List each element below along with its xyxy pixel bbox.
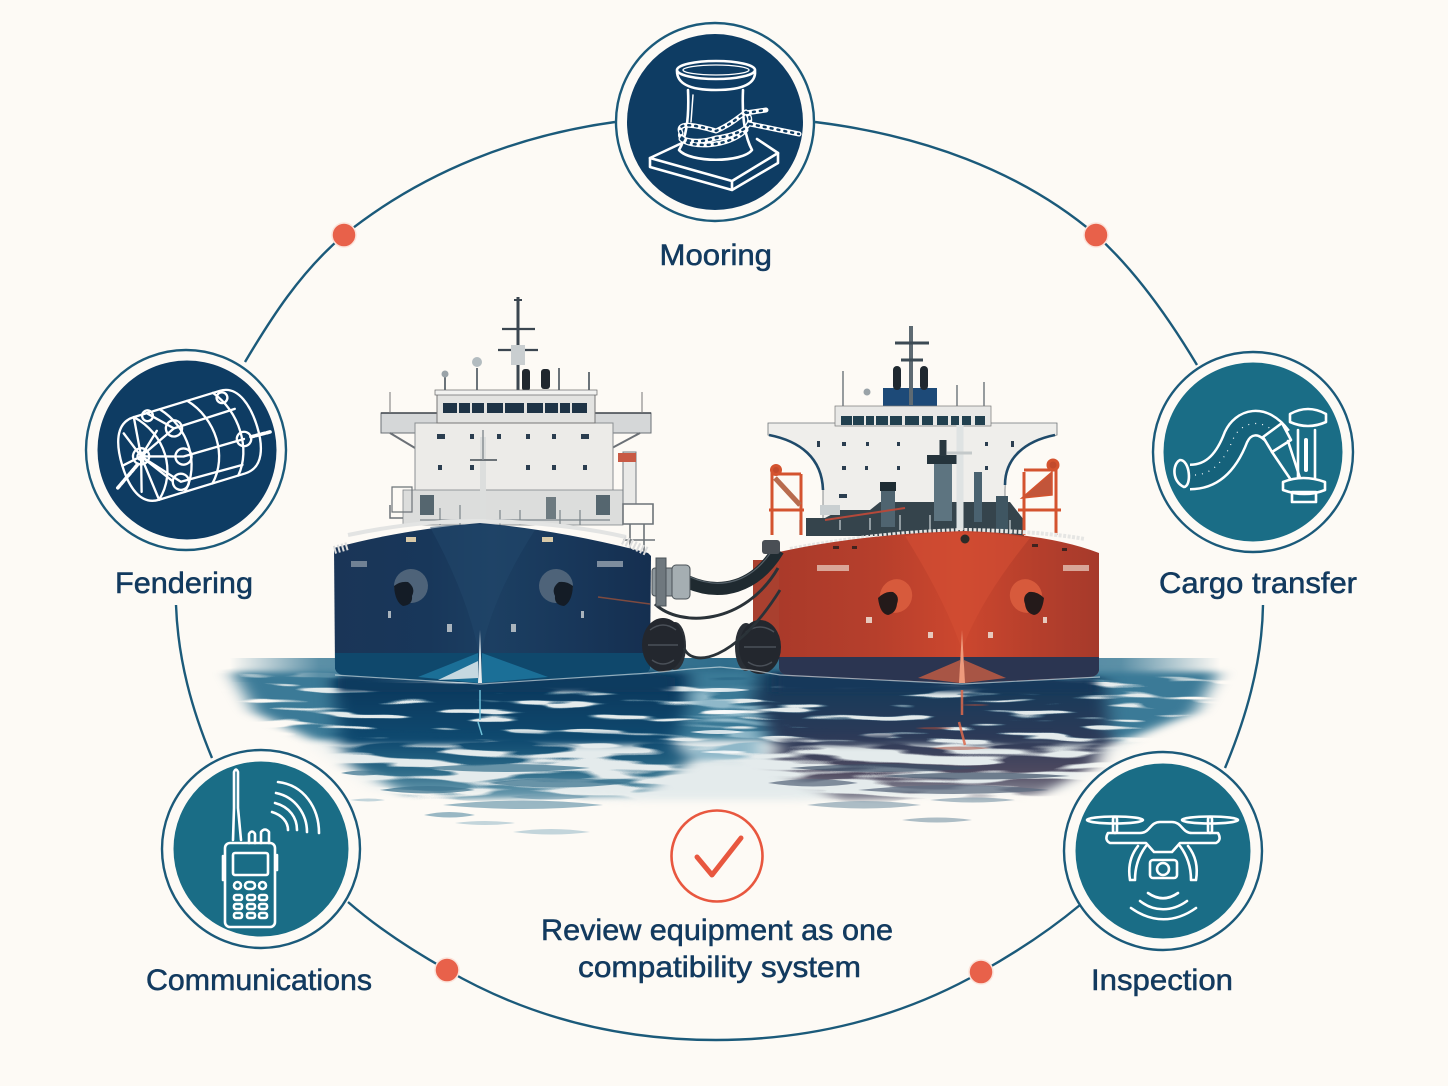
wing arches [769,435,1055,490]
hull [779,531,1099,683]
rear hull [753,560,782,650]
right anchor [1004,574,1048,618]
fender pair: red ship side [735,620,781,674]
central message: compatibility system [578,951,861,984]
superstructure [768,423,1057,525]
thin lower hose [684,590,780,658]
label: Cargo transfer: Cargo transfer [1159,567,1357,600]
red tanker [753,326,1099,683]
manifold [652,558,690,606]
bridge wings [381,392,651,448]
hull markings [817,534,1089,638]
navy tanker [334,297,655,683]
thin middle hose [655,568,778,618]
ring nodes [332,223,1108,984]
boot stripe [779,657,1099,683]
ring connecting the five equipment areas [176,122,1263,1040]
railing [790,530,1085,549]
label: Fendering: Fendering [115,567,253,600]
fender pair: dark ship side [642,618,686,672]
white forward post [947,425,972,530]
left anchor [388,563,434,609]
bow wake [418,630,548,683]
icon badge: communications [162,750,360,948]
label: Inspection: Inspection [1091,964,1233,997]
icon badge: fendering [86,350,286,550]
waterline [335,667,1100,684]
hull [334,523,651,683]
central message [541,914,893,984]
icon: cargo hose and flanged pipe [1174,409,1326,502]
lower water ripples [341,688,1070,834]
bridge [435,390,597,423]
forward mast [470,430,497,525]
bridge [835,406,991,426]
bow flare [905,532,1030,650]
accommodation block [415,423,613,493]
orange crane left [769,466,804,535]
icon: net-covered pneumatic fender [99,378,280,510]
accommodation windows [437,434,589,470]
bow flare [430,525,535,660]
icon badge: cargo transfer [1153,352,1353,552]
mast [442,297,589,392]
icon badge: inspection [1064,752,1262,950]
icon badge: mooring [616,23,814,221]
icon: inspection drone [1087,816,1238,919]
main cargo hose [688,550,778,588]
icon: check mark [672,810,762,902]
orange crane right [1018,460,1061,535]
label: Mooring: Mooring [660,239,772,272]
water and reflections [230,658,1220,834]
icon: handheld VHF radio [223,770,319,927]
boot stripe [335,653,650,683]
windows [817,441,1014,498]
railings [348,521,626,537]
right anchor [533,563,579,609]
bow wake [918,630,1006,683]
left anchor [874,574,918,618]
label: Communications: Communications [146,964,372,997]
mast and funnels [843,326,984,406]
icon: mooring bollard with rope [650,61,799,190]
lower deckhouse [390,452,655,560]
hoses and fenders between the ships [642,540,781,674]
central message: Review equipment as one [541,914,893,947]
pale under-layer [270,680,1190,800]
hull markings [351,537,623,632]
deck machinery [800,440,1024,536]
